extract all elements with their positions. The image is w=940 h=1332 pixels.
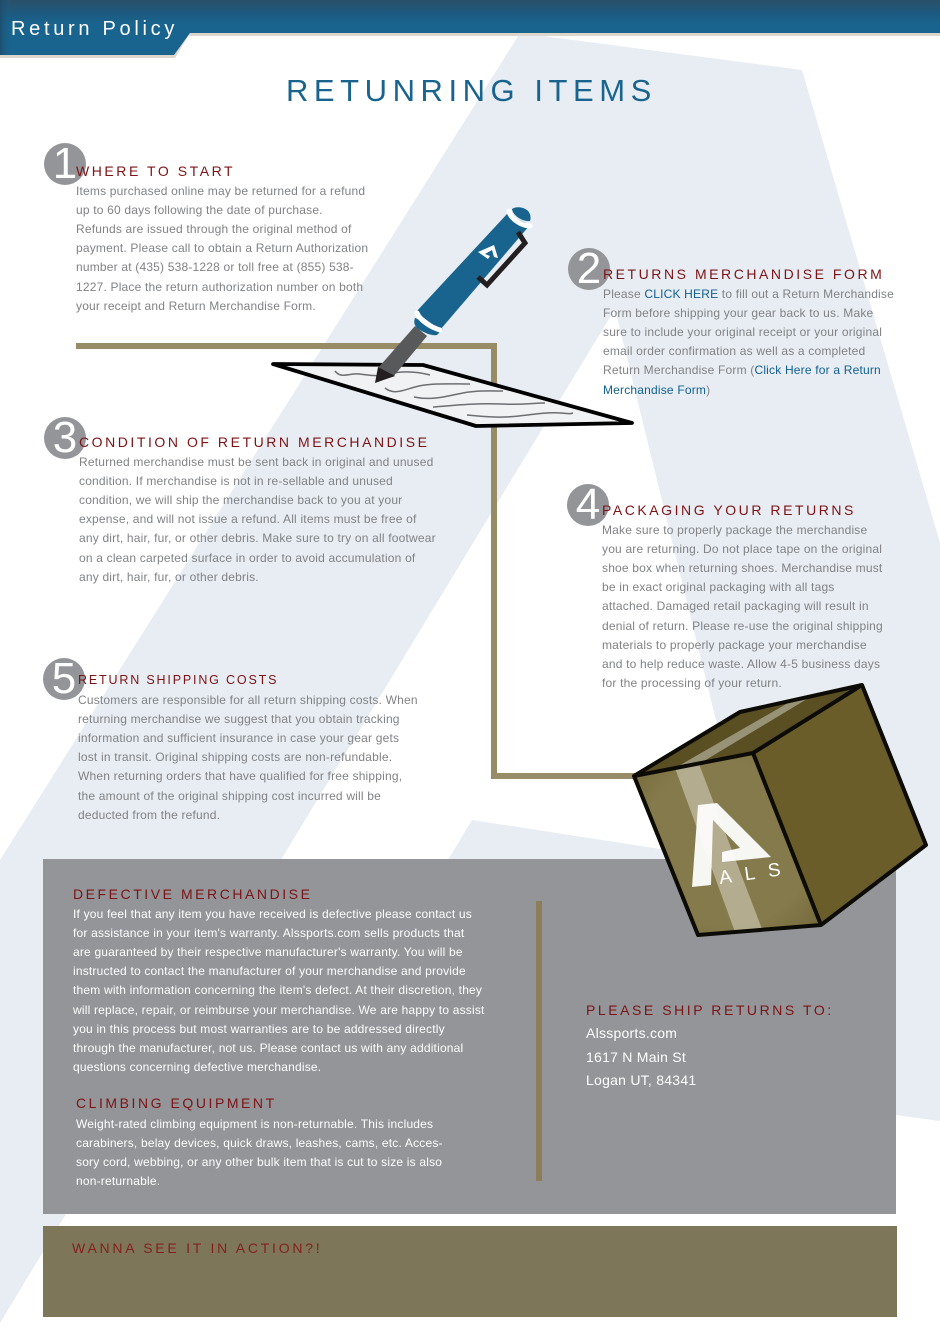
body text: Merchandise Form) [603, 383, 710, 397]
body text: questions concerning defective merchandise. [73, 1060, 321, 1074]
body text: condition. If merchandise is not in re-sellable and unused [79, 474, 393, 488]
pen collar [417, 313, 440, 330]
box edges [634, 685, 926, 935]
packing tape [675, 696, 812, 932]
body text: for the processing of your return. [602, 676, 782, 690]
body text: are guaranteed by their respective manufacturer's warranty. You will be [73, 945, 463, 959]
body text [603, 287, 894, 397]
box top face [634, 685, 862, 776]
heading: WHERE TO START [76, 163, 235, 179]
heading: DEFECTIVE MERCHANDISE [73, 886, 312, 902]
body text: Items purchased online may be returned for a refund [76, 184, 365, 198]
body text: you are returning. Do not place tape on the original [602, 542, 882, 556]
body text [76, 184, 368, 313]
number badge 1: 1 [53, 139, 77, 188]
heading: RETURN SHIPPING COSTS [78, 673, 278, 687]
body text: materials to properly package your merchandise [602, 638, 867, 652]
body text: will replace, repair, or reimburse your merchandise. We are happy to assist [73, 1003, 485, 1017]
body text: up to 60 days following the date of purchase. [76, 203, 323, 217]
heading: CONDITION OF RETURN MERCHANDISE [79, 434, 430, 450]
body text: sure to include your original receipt or your original [603, 325, 882, 339]
defective merchandise block [73, 886, 485, 1074]
body text: any dirt, hair, fur, or other debris. [79, 570, 259, 584]
body text: for assistance in your item's warranty. Alssports.com sells products that [73, 926, 464, 940]
body text: you in this process but most warranties are to be addressed directly [73, 1022, 445, 1036]
body text: Form before shipping your gear back to us. Make [603, 306, 873, 320]
address: Alssports.com [586, 1025, 677, 1041]
number badge 4 [567, 484, 609, 526]
body text: Please CLICK HERE to fill out a Return Merchandise [603, 287, 894, 301]
body text: non-returnable. [76, 1174, 160, 1188]
body text: attached. Damaged retail packaging will result in [602, 599, 869, 613]
body text [76, 1117, 443, 1188]
body text: Customers are responsible for all return shipping costs. When [78, 693, 418, 707]
header label: Return Policy [11, 18, 178, 40]
body text: condition, we will ship the merchandise back to you at your [79, 493, 402, 507]
box logo letters: ALS [718, 858, 795, 889]
box front face [634, 753, 821, 935]
pen cap [512, 207, 531, 221]
number badge 5 [43, 658, 85, 700]
body text: lost in transit. Original shipping costs are non-refundable. [78, 750, 392, 764]
body text: sory cord, webbing, or any other bulk item that is cut to size is also [76, 1155, 442, 1169]
title: RETUNRING ITEMS [286, 73, 657, 108]
body text [78, 693, 418, 822]
number badge 5: 5 [52, 654, 76, 703]
number badge 4: 4 [576, 480, 600, 529]
body text: the amount of the original shipping cost incurred will be [78, 789, 381, 803]
box right face [753, 685, 926, 925]
connector line [76, 343, 635, 779]
section 2: returns merchandise form [568, 244, 894, 397]
pen logo [478, 245, 498, 259]
pen barrel [416, 214, 530, 330]
body text: through the manufacturer, not us. Please contact us with any additional [73, 1041, 463, 1055]
body text [73, 907, 485, 1074]
pen nozzle [378, 326, 427, 377]
body text: email order confirmation as well as a completed [603, 344, 865, 358]
paper [273, 364, 632, 426]
box logo [692, 803, 771, 887]
shipping address block [586, 1002, 834, 1088]
number badge 1 [44, 143, 86, 185]
panel: defective merchandise and shipping address [43, 859, 896, 1214]
panel divider [536, 901, 542, 1181]
body text: When returning orders that have qualified for free shipping, [78, 769, 402, 783]
body text: Weight-rated climbing equipment is non-returnable. This includes [76, 1117, 433, 1131]
body text: deducted from the refund. [78, 808, 220, 822]
climbing equipment block [76, 1095, 443, 1188]
body text: your receipt and Return Merchandise Form. [76, 299, 316, 313]
address [586, 1025, 696, 1088]
video section heading: WANNA SEE IT IN ACTION?! [72, 1240, 322, 1256]
body text: be in exact original packaging with all tags [602, 580, 834, 594]
body text: number at (435) 538-1228 or toll free at (855) 538- [76, 260, 354, 274]
section 1: where to start [44, 139, 368, 313]
body text: instructed to contact the manufacturer of your merchandise and provide [73, 964, 466, 978]
body text: carabiners, belay devices, quick draws, leashes, cams, etc. Acces- [76, 1136, 443, 1150]
address: Logan UT, 84341 [586, 1072, 696, 1088]
body text: 1227. Place the return authorization number on both [76, 280, 363, 294]
body text: and to help reduce waste. Allow 4-5 business days [602, 657, 880, 671]
body text: information and sufficient insurance in case your gear gets [78, 731, 399, 745]
heading: PLEASE SHIP RETURNS TO: [586, 1002, 834, 1018]
heading: CLIMBING EQUIPMENT [76, 1095, 277, 1111]
body text: shoe box when returning shoes. Merchandise must [602, 561, 882, 575]
body text: payment. Please call to obtain a Return Authorization [76, 241, 368, 255]
pen clip [478, 232, 525, 285]
body text: If you feel that any item you have received is defective please contact us [73, 907, 472, 921]
body text [79, 455, 436, 584]
body text: Return Merchandise Form (Click Here for a Return [603, 363, 881, 377]
number badge 2 [568, 248, 610, 290]
number badge 3: 3 [53, 413, 77, 462]
address: 1617 N Main St [586, 1048, 686, 1064]
number badge 2: 2 [577, 244, 601, 293]
body text: on a clean carpeted surface in order to avoid accumulation of [79, 551, 415, 565]
body text [602, 523, 883, 690]
body text: them with information concerning the item's defect. At their discretion, they [73, 983, 482, 997]
section 3: condition of return merchandise [44, 413, 436, 584]
body text: expense, and will not issue a refund. All items must be free of [79, 512, 416, 526]
number badge 3 [44, 417, 86, 459]
header banner [0, 0, 940, 58]
body text: Refunds are issued through the original method of [76, 222, 351, 236]
section 5: return shipping costs [43, 654, 418, 822]
illustration: shipping box [632, 683, 928, 937]
section 4: packaging your returns [567, 480, 883, 690]
panel: wanna see it in action [43, 1226, 897, 1317]
body text: Make sure to properly package the merchandise [602, 523, 867, 537]
pen tip [375, 367, 395, 383]
illustration: pen writing on paper [271, 207, 634, 428]
heading: RETURNS MERCHANDISE FORM [603, 266, 884, 282]
body text: returning merchandise we suggest that you obtain tracking [78, 712, 400, 726]
body text: any dirt, hair, fur, or other debris. Make sure to try on all footwear [79, 531, 436, 545]
heading: PACKAGING YOUR RETURNS [602, 502, 856, 518]
body text: denial of return. Please re-use the original shipping [602, 619, 883, 633]
body text: Returned merchandise must be sent back in original and unused [79, 455, 433, 469]
